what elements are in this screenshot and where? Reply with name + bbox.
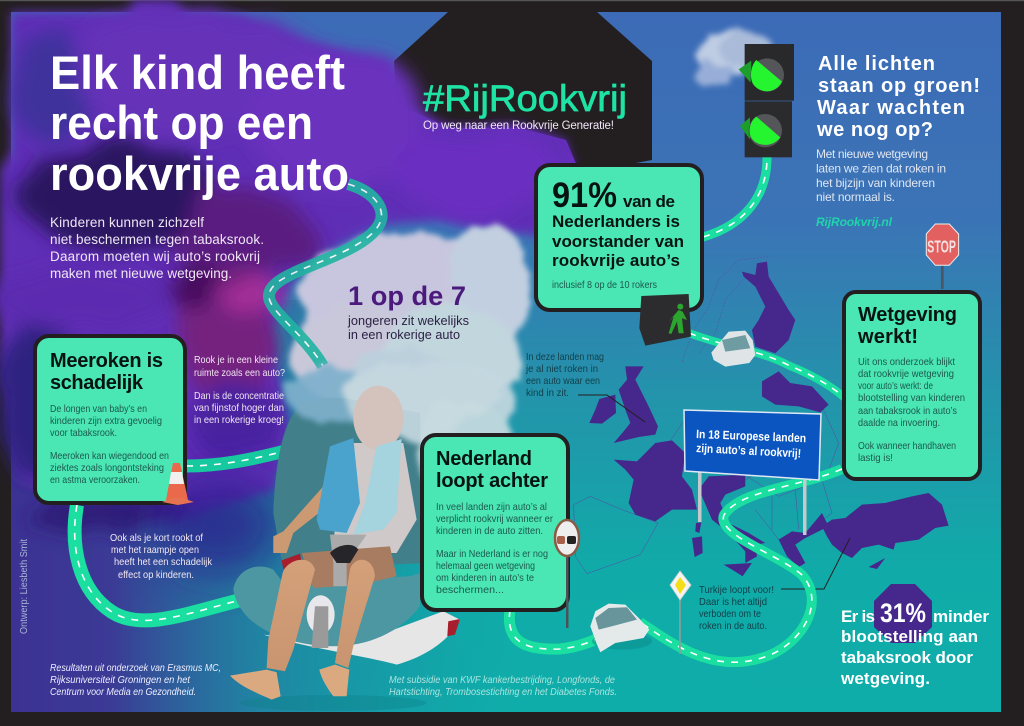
title <box>50 46 349 200</box>
intro text: niet beschermen tegen tabaksrook. <box>50 232 264 247</box>
text: kort roken: Ook als je kort rookt of <box>110 532 203 544</box>
road sign: 18 European countries: zijn auto’s al rookvrij! <box>696 441 801 460</box>
Ireland <box>589 395 616 424</box>
dummy arm <box>273 486 332 553</box>
text: alle lichten staan op groen: Met nieuwe wetgeving <box>816 147 928 161</box>
stat: 31 percent less exposure: minder <box>933 607 989 626</box>
panel: wetgeving werkt <box>844 292 980 479</box>
stat: 31 percent less exposure: wetgeving. <box>840 669 930 688</box>
panel: meeroken is schadelijk: Meeroken is <box>50 350 163 372</box>
panel: Nederland loopt achter: verplicht rookvrij wanneer er <box>436 513 553 525</box>
text: alle lichten staan op groen: staan op groen! <box>818 75 980 97</box>
icon: pedestrian signal <box>639 294 691 346</box>
Corsica <box>695 522 701 533</box>
text: research sources: Resultaten uit onderzoek van Erasmus MC, <box>50 662 221 674</box>
panel: wetgeving werkt: blootstelling van kinderen <box>858 392 965 404</box>
panel: wetgeving werkt: daalde na invoering. <box>858 417 940 429</box>
intro text: Daarom moeten wij auto’s rookvrij <box>50 249 260 264</box>
panel: Nederland loopt achter: beschermen... <box>436 584 504 596</box>
text: Turkije: verboden om te <box>699 608 761 620</box>
Greece <box>779 513 829 567</box>
panel: Nederland loopt achter <box>422 435 568 610</box>
text: research sources <box>50 662 221 698</box>
seat clip <box>307 595 335 634</box>
panel: meeroken is schadelijk: schadelijk <box>50 372 144 394</box>
text: research sources: Rijksuniversiteit Groningen en het <box>50 674 191 686</box>
panel: Nederland loopt achter: loopt achter <box>436 470 548 492</box>
text: Turkije <box>699 584 774 632</box>
road: connector behind meeroken box <box>186 451 285 466</box>
text: research sources: Centrum voor Media en Gezondheid. <box>50 686 196 698</box>
panel: wetgeving werkt: lastig is! <box>858 452 893 464</box>
text: subsidy: Met subsidie van KWF kankerbestrijding, Longfonds, de <box>389 674 615 686</box>
stat: 1 op de 7: jongeren zit wekelijks <box>347 313 469 328</box>
text: alle lichten staan op groen <box>816 53 980 229</box>
panel: wetgeving werkt: Ook wanneer handhaven <box>858 440 956 452</box>
intro text <box>50 215 264 281</box>
stat: 1 op de 7: 1 op de 7 <box>348 281 466 311</box>
map of Europe <box>574 257 949 576</box>
illustration: crash dummy child <box>230 386 417 700</box>
title: rookvrije auto <box>50 147 349 200</box>
text: alle lichten staan op groen: het bijzijn van kinderen <box>816 176 935 190</box>
UK <box>614 366 658 443</box>
Turkey <box>822 493 949 558</box>
road: winding past title <box>269 184 382 366</box>
Finland <box>742 262 795 353</box>
panel: Nederland loopt achter: om kinderen in auto’s te <box>436 572 534 584</box>
stat: 1 op de 7: in een rokerige auto <box>348 327 460 342</box>
Sicily <box>724 563 752 576</box>
harness pads <box>317 438 360 533</box>
callout line: UK <box>578 395 645 422</box>
straps and buckle <box>330 535 367 586</box>
text: In deze landen: een auto waar een <box>526 375 600 387</box>
icon: traffic light <box>739 44 794 157</box>
callout line: Turkey <box>781 538 850 589</box>
road sign: 18 European countries <box>684 410 821 535</box>
icon: priority road sign <box>670 571 691 654</box>
title: Elk kind heeft <box>50 46 345 99</box>
Sardinia <box>692 536 703 557</box>
panel: meeroken is schadelijk: kinderen zijn extra gevoelig <box>50 415 162 427</box>
panel: 91 percent: voorstander van <box>552 232 684 251</box>
icon: overtaking sign <box>555 520 579 628</box>
seat shadow <box>240 695 427 711</box>
icon: car at bottom <box>590 604 652 652</box>
text: fijnstof concentration: Dan is de concentratie <box>194 390 284 402</box>
seat white base <box>263 611 460 665</box>
panel: wetgeving werkt: aan tabaksrook in auto’s <box>858 405 957 417</box>
text: fijnstof concentration: Rook je in een kleine <box>194 354 278 366</box>
text: In deze landen <box>525 351 604 399</box>
text: Turkije: Turkije loopt voor! <box>699 584 774 596</box>
stat: 31 percent less exposure: tabaksrook door <box>841 648 973 667</box>
smoke: purple and magenta cloud <box>0 0 578 575</box>
panel: wetgeving werkt: Uit ons onderzoek blijkt <box>858 356 955 368</box>
text: kort roken <box>110 532 213 581</box>
intro text: maken met nieuwe wetgeving. <box>50 266 232 281</box>
text: subsidy: Hartstichting, Trombosestichting en het Diabetes Fonds. <box>389 686 617 698</box>
illustration: car seat back and base <box>233 398 460 711</box>
panel: 91 percent <box>536 165 702 310</box>
feet <box>230 670 281 700</box>
panel: meeroken is schadelijk: De longen van baby’s en <box>50 403 147 415</box>
stat: 31 percent less exposure <box>840 584 989 688</box>
road: from meeroken box to car seat <box>75 505 240 620</box>
panel: dark hexagon header background <box>394 12 652 168</box>
Italy and Alps <box>699 475 765 563</box>
dummy chest <box>333 443 417 553</box>
right leg <box>335 560 375 668</box>
icon: cloud behind traffic light <box>693 29 773 87</box>
campaign hashtag: #RijRookvrij <box>423 78 627 119</box>
panel: wetgeving werkt: voor auto’s werkt: de <box>858 380 933 392</box>
seat back <box>273 398 423 570</box>
text: Turkije: roken in de auto. <box>699 620 767 632</box>
Cyprus <box>869 558 885 569</box>
Baltic and Poland <box>762 371 829 412</box>
country outlines <box>574 496 658 574</box>
panel: Nederland loopt achter: helemaal geen wetgeving <box>436 560 535 572</box>
panel: Nederland loopt achter: Maar in Nederland is er nog <box>436 548 548 560</box>
intro text: Kinderen kunnen zichzelf <box>50 215 204 230</box>
panel: 91 percent: van de <box>623 192 675 211</box>
panel: meeroken is schadelijk: voor tabaksrook. <box>50 427 117 439</box>
panel: wetgeving werkt: dat rookvrije wetgeving <box>858 368 954 380</box>
panel: 91 percent: Nederlanders is <box>552 212 680 231</box>
text: In deze landen: In deze landen mag <box>526 351 604 363</box>
panel: Nederland loopt achter: kinderen in de auto zitten. <box>436 525 543 537</box>
text: fijnstof concentration <box>194 354 285 426</box>
text: kort roken: met het raampje open <box>111 544 199 556</box>
text: alle lichten staan op groen: Waar wachten <box>817 97 965 119</box>
panel: Nederland loopt achter: In veel landen zijn auto’s al <box>436 501 547 513</box>
road sign: 18 European countries: In 18 Europese landen <box>696 427 806 445</box>
text: Turkije: Daar is het altijd <box>699 596 767 608</box>
road: bottom to Nederland box <box>509 610 600 649</box>
panel: meeroken is schadelijk: Meeroken kan wiegendood en <box>50 450 169 462</box>
panel: 91 percent: 91% <box>552 176 617 215</box>
dummy head <box>353 386 403 450</box>
text: alle lichten staan op groen: RijRookvrij.nl <box>816 215 893 229</box>
text: kort roken: effect op kinderen. <box>118 569 194 581</box>
dummy hips <box>302 546 397 588</box>
Scandinavia outline <box>682 257 769 363</box>
text: In deze landen: je al niet roken in <box>525 363 598 375</box>
text: fijnstof concentration: van fijnstof hoger dan <box>194 402 284 414</box>
text: alle lichten staan op groen: laten we zien dat roken in <box>816 162 946 176</box>
left leg <box>267 560 315 671</box>
title: recht op een <box>50 96 313 149</box>
road: traffic light to 91% box <box>703 155 767 237</box>
icon: stop sign <box>926 224 959 289</box>
panel: 91 percent: inclusief 8 op de 10 rokers <box>552 279 657 291</box>
smoke: haze over seat top <box>288 360 515 500</box>
text: fijnstof concentration: ruimte zoals een auto? <box>194 367 285 379</box>
icon: traffic cone <box>162 463 194 505</box>
text: alle lichten staan op groen: Alle lichten <box>818 53 935 75</box>
road: pedestrian light to wetgeving box <box>689 333 845 398</box>
panel: meeroken is schadelijk: ziektes zoals longontsteking <box>50 462 164 474</box>
panel: 91 percent: rookvrije auto’s <box>552 251 680 270</box>
road: across map through Europe <box>640 469 842 662</box>
text: fijnstof concentration: in een rokerige kroeg! <box>194 414 284 426</box>
stat: 31 percent less exposure: blootstelling aan <box>841 627 978 646</box>
credit: designer: Ontwerp: Liesbeth Smit <box>18 539 30 634</box>
icon: car on map <box>711 331 755 367</box>
panel: Nederland loopt achter: Nederland <box>436 448 532 470</box>
text: subsidy <box>389 674 617 698</box>
panel: meeroken is schadelijk <box>35 336 185 503</box>
text: alle lichten staan op groen: niet normaal is. <box>816 190 895 204</box>
text: kort roken: heeft het een schadelijk <box>114 556 213 568</box>
smoke: white cloud around the child <box>290 223 530 450</box>
stat: 31 percent less exposure: 31% <box>880 598 926 628</box>
stat: 1 op de 7 <box>347 281 469 342</box>
icon: stop sign: STOP <box>927 237 956 257</box>
France <box>614 440 697 521</box>
seat cushion <box>233 566 421 646</box>
stat: 31 percent less exposure: Er is <box>841 607 875 626</box>
panel: meeroken is schadelijk: en astma veroorzaken. <box>50 474 140 486</box>
panel: wetgeving werkt: werkt! <box>857 326 918 348</box>
text: In deze landen: kind in zit. <box>526 387 569 399</box>
panel: wetgeving werkt: Wetgeving <box>858 304 957 326</box>
hip tag <box>282 554 302 569</box>
campaign hashtag: Op weg naar een Rookvrije Generatie! <box>423 120 614 132</box>
text: alle lichten staan op groen: we nog op? <box>816 119 933 141</box>
